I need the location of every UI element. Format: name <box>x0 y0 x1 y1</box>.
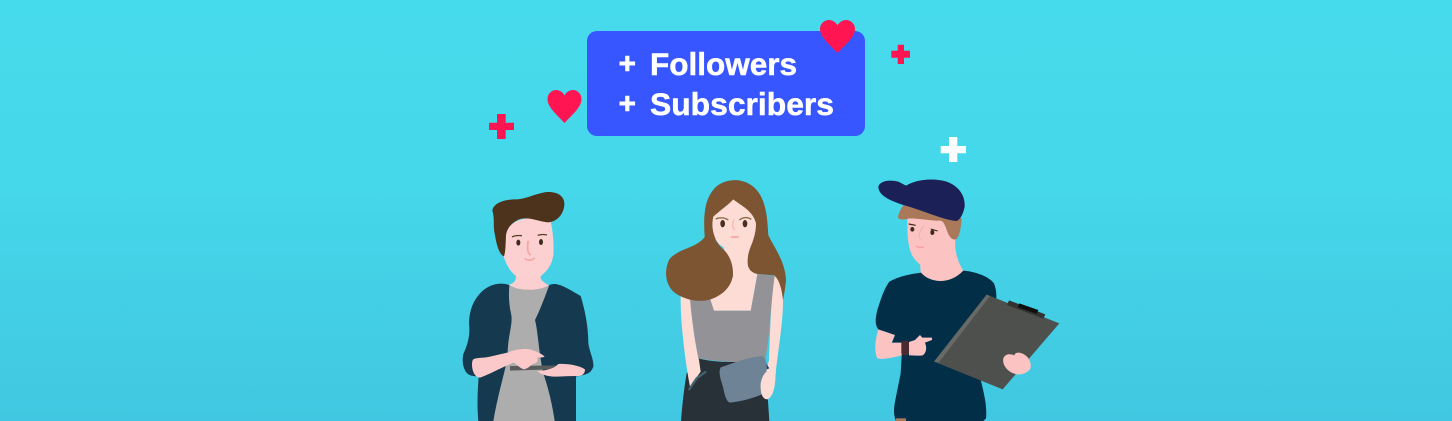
pocket line <box>689 372 705 389</box>
phone <box>510 365 563 371</box>
head <box>712 199 756 252</box>
hand on clipboard <box>1003 353 1031 374</box>
icon: red plus left <box>489 114 514 139</box>
skirt <box>681 357 769 421</box>
icon: red plus right <box>891 45 910 64</box>
icon: heart left <box>548 90 582 123</box>
neck and chest <box>508 270 550 294</box>
text: plus followers: Followers <box>650 46 797 82</box>
jacket right <box>535 284 593 421</box>
hand <box>761 371 775 399</box>
icon: heart top right <box>820 20 855 53</box>
person: woman with long hair <box>666 180 786 421</box>
tablet <box>762 356 769 370</box>
arm right <box>760 275 783 399</box>
face <box>512 235 547 260</box>
text: plus subscribers: Subscribers <box>650 86 834 122</box>
neck <box>920 242 964 281</box>
hair <box>492 192 564 256</box>
hand pointing <box>909 335 932 356</box>
hair back <box>704 180 786 300</box>
jacket left <box>463 284 512 421</box>
person: man with phone <box>463 192 593 421</box>
t-shirt <box>876 271 996 421</box>
face <box>909 224 938 248</box>
neck and chest <box>710 242 757 311</box>
head <box>907 218 955 265</box>
head <box>503 218 554 276</box>
arm left <box>681 295 701 387</box>
cap <box>878 180 965 221</box>
clipboard clip <box>1007 300 1045 319</box>
arm <box>875 329 903 359</box>
watch <box>901 341 909 355</box>
face <box>716 218 751 237</box>
callout: followers and subscribers <box>587 31 865 136</box>
shirt <box>493 285 556 421</box>
top <box>690 274 775 362</box>
icon: white plus <box>941 137 966 162</box>
trousers hint <box>896 418 906 421</box>
person: man with cap and clipboard <box>875 180 1059 421</box>
arms and hands <box>472 349 545 378</box>
hair front <box>666 229 733 301</box>
clipboard <box>934 295 1059 389</box>
hair <box>898 205 962 240</box>
